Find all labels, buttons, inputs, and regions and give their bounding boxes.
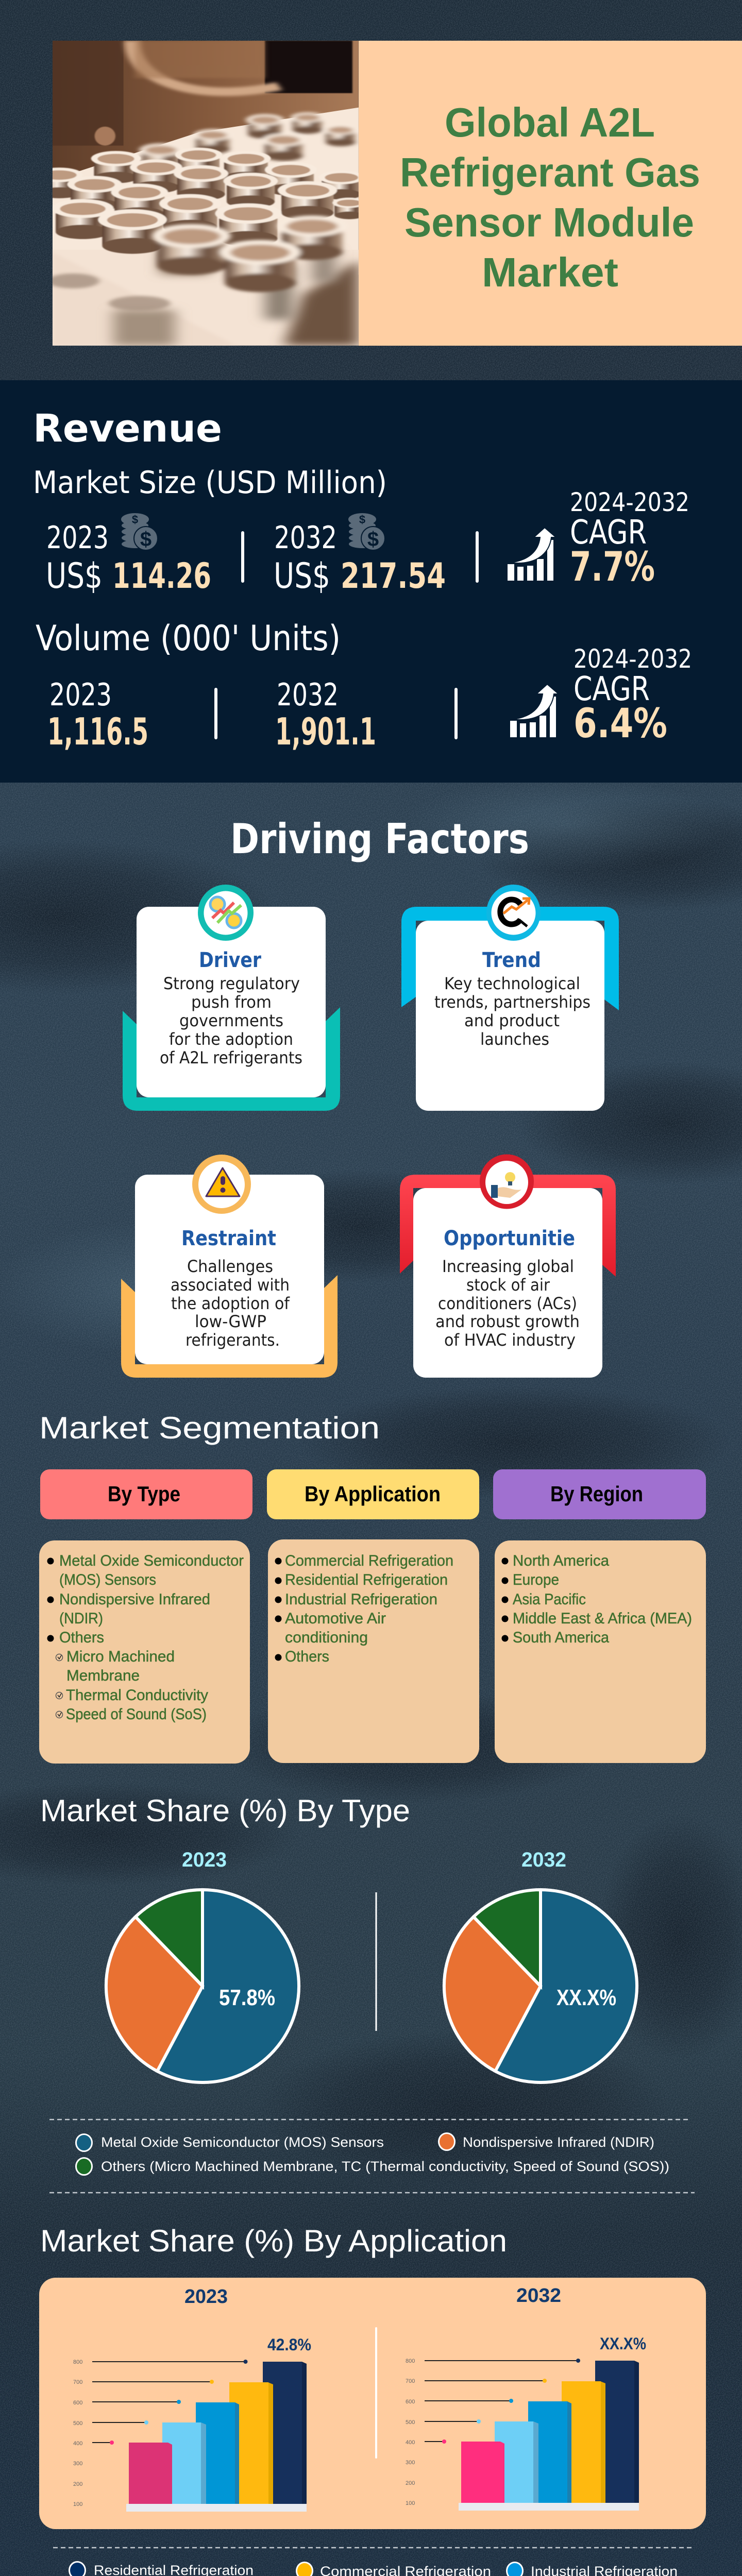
icon: trend: [486, 885, 541, 941]
icon: growth arrow: [508, 528, 556, 581]
text: trend: [434, 948, 591, 1049]
icon: growth arrow: [510, 684, 559, 737]
heading: market share by application: Market Share (%) By Application: [40, 2224, 507, 2258]
text: opportunity: stock of air: [466, 1275, 550, 1295]
text: driver: Driver: [199, 948, 261, 972]
panel: restraint: [121, 1155, 338, 1378]
legend: market share by type: [76, 2133, 669, 2175]
text: opportunity: Increasing global: [442, 1257, 574, 1276]
heading: market segmentation: Market Segmentation: [39, 1411, 380, 1445]
chart: bars 2023: [73, 2286, 311, 2512]
chart: bars 2023: 200: [73, 2481, 82, 2487]
chart: pie 2032: [444, 1849, 637, 2082]
stat: 2032 volume: 2032: [277, 677, 339, 713]
chart: bars 2023: 42.8%: [267, 2335, 311, 2354]
panel: by type header: By Type: [108, 1482, 180, 1506]
panel: by region header: By Region: [550, 1482, 643, 1506]
divider: [375, 2327, 377, 2459]
text: restraint: Restraint: [181, 1227, 276, 1250]
title: Global A2L: [445, 99, 655, 145]
title: [400, 99, 700, 295]
text: driver: for the adoption: [169, 1029, 293, 1049]
stat: 2023 volume: 2023: [49, 677, 112, 713]
title: Sensor Module: [404, 199, 694, 245]
text: trend: and product: [464, 1011, 560, 1030]
chart: bars 2023: 600: [73, 2400, 82, 2406]
text: opportunity: [435, 1227, 580, 1350]
stat: 2032 market size: US$: [274, 556, 330, 597]
legend: market share by application: [69, 2562, 678, 2576]
stat: 2032 volume: 1,901.1: [275, 710, 376, 753]
panel: by type list: (NDIR): [59, 1610, 103, 1627]
panel: by application list: Residential Refrigeration: [285, 1571, 448, 1588]
stat: 2023 market size: 114.26: [112, 556, 211, 597]
chart: pie 2023: 57.8%: [219, 1985, 275, 2010]
panel: opportunity: [400, 1154, 616, 1378]
icon: coins 2023: $: [140, 528, 151, 551]
chart: pie 2032: XX.X%: [556, 1985, 616, 2010]
chart: bars 2032: 2032: [516, 2285, 561, 2307]
chart: bars 2032: 200: [406, 2480, 415, 2486]
icon: driver: [198, 885, 254, 941]
chart: bars 2032: 100: [406, 2500, 415, 2506]
stat: volume CAGR: [574, 644, 692, 747]
panel: by region header: [493, 1469, 706, 1519]
stat: volume CAGR: CAGR: [574, 670, 650, 708]
text: restraint: the adoption of: [171, 1294, 290, 1313]
stat: revenue CAGR: [570, 487, 689, 590]
panel: by type list: [39, 1540, 250, 1764]
panel: by region list: Middle East & Africa (MEA): [513, 1610, 692, 1627]
text: driver: push from: [191, 992, 272, 1012]
chart: bars 2023: 400: [73, 2441, 82, 2447]
text: opportunity: of HVAC industry: [444, 1330, 576, 1350]
text: restraint: low-GWP: [195, 1312, 266, 1331]
heading: market share by type: Market Share (%) By Type: [40, 1793, 410, 1828]
divider: [214, 688, 217, 739]
divider: [375, 1892, 377, 2031]
chart: bars 2023: 300: [73, 2461, 82, 2467]
icon: coins 2032: [348, 513, 385, 551]
heading: driving factors: Driving Factors: [230, 815, 529, 863]
panel: driver: [123, 885, 340, 1111]
stat: volume CAGR: 2024-2032: [574, 644, 692, 674]
panel: by region list: [495, 1540, 706, 1763]
panel: by application header: [267, 1469, 479, 1519]
text: restraint: [171, 1227, 290, 1350]
panel: by type list: Thermal Conductivity: [66, 1687, 208, 1704]
panel: by type list: Metal Oxide Semiconductor: [59, 1552, 244, 1569]
chart: pie 2023: [106, 1849, 299, 2082]
text: trend: trends, partnerships: [434, 992, 591, 1012]
chart: pie 2032: 2032: [521, 1849, 566, 1871]
stat: volume CAGR: 6.4%: [574, 701, 667, 747]
stat: revenue CAGR: CAGR: [570, 514, 647, 552]
panel: by application header: By Application: [305, 1482, 441, 1506]
panel: by type list: (MOS) Sensors: [59, 1571, 156, 1588]
panel: by type header: [40, 1469, 252, 1519]
text: opportunity: and robust growth: [435, 1312, 580, 1331]
panel: by region list: North America: [513, 1552, 609, 1569]
panel: by type list: Nondispersive Infrared: [59, 1591, 210, 1608]
text: restraint: refrigerants.: [185, 1330, 280, 1350]
panel: by application list: Commercial Refrigeration: [285, 1552, 453, 1569]
chart: bars 2023: 500: [73, 2420, 82, 2427]
chart: pie 2023: 2023: [182, 1849, 227, 1871]
icon: coins 2032: $: [367, 528, 379, 551]
stat: 2023 volume: 1,116.5: [47, 710, 148, 753]
stat: 2032 market size: [274, 520, 446, 597]
panel: by application list: [268, 1539, 479, 1763]
stat: revenue CAGR: 2024-2032: [570, 487, 689, 517]
text: driver: of A2L refrigerants: [160, 1048, 302, 1067]
chart: bars 2032: 500: [406, 2419, 415, 2426]
stat: revenue CAGR: 7.7%: [570, 544, 655, 590]
chart: bars 2023: 700: [73, 2379, 82, 2385]
chart: bars 2023: 100: [73, 2501, 82, 2507]
stat: 2032 volume: [275, 677, 376, 753]
chart: bars 2032: 700: [406, 2378, 415, 2384]
icon: coins 2023: $: [132, 513, 138, 526]
divider: [241, 531, 244, 583]
panel: application charts: [39, 2278, 706, 2529]
heading: market size: Market Size (USD Million): [33, 465, 387, 501]
text: opportunity: Opportunitie: [444, 1227, 575, 1250]
icon: coins 2032: $: [359, 513, 365, 526]
text: trend: Key technological: [444, 974, 580, 993]
icon: opportunity: [480, 1154, 534, 1209]
chart: bars 2032: 400: [406, 2439, 415, 2446]
panel: revenue: [0, 380, 742, 783]
panel: by application list: Others: [285, 1648, 329, 1665]
text: restraint: associated with: [171, 1275, 290, 1295]
panel: by type list: Speed of Sound (SoS): [66, 1706, 207, 1723]
chart: bars 2032: [406, 2285, 646, 2511]
text: opportunity: conditioners (ACs): [438, 1294, 577, 1313]
stat: 2023 market size: 2023: [46, 520, 109, 556]
panel: by application list: Automotive Air: [285, 1610, 386, 1627]
chart: bars 2032: 600: [406, 2399, 415, 2405]
icon: coins 2023: [121, 513, 158, 551]
legend: market share by type: Metal Oxide Semiconductor (MOS) Sensors: [101, 2134, 384, 2150]
panel: by type list: Membrane: [66, 1667, 140, 1684]
panel: by region list: Asia Pacific: [513, 1591, 586, 1608]
text: trend: Trend: [482, 948, 541, 972]
divider: [476, 531, 479, 583]
icon: restraint: [192, 1155, 251, 1214]
panel: by application list: Industrial Refrigeration: [285, 1591, 437, 1608]
hero photo: gas sensors: [36, 41, 366, 346]
text: trend: launches: [480, 1029, 549, 1049]
panel: by type list: Others: [59, 1629, 104, 1646]
stat: 2023 market size: [46, 520, 211, 597]
heading: revenue: Revenue: [33, 406, 222, 451]
chart: bars 2032: XX.X%: [600, 2334, 646, 2353]
stat: 2032 market size: 217.54: [341, 556, 446, 597]
title: Market: [482, 249, 618, 295]
chart: bars 2032: 300: [406, 2460, 415, 2466]
chart: bars 2023: 800: [73, 2359, 82, 2365]
panel: by region list: Europe: [513, 1571, 559, 1588]
legend: market share by type: Others (Micro Machined Membrane, TC (Thermal conductivity, Speed of Sound (SOS)): [101, 2159, 669, 2174]
legend: market share by type: Nondispersive Infrared (NDIR): [463, 2134, 654, 2150]
panel: title box: [359, 41, 742, 346]
text: driver: [160, 948, 302, 1067]
stat: 2023 market size: US$: [46, 556, 103, 597]
text: restraint: Challenges: [187, 1257, 273, 1276]
panel: by type list: Micro Machined: [66, 1648, 175, 1665]
panel: by region list: South America: [513, 1629, 609, 1646]
stat: 2032 market size: 2032: [274, 520, 337, 556]
heading: volume: Volume (000' Units): [36, 618, 341, 659]
title: Refrigerant Gas: [400, 149, 700, 195]
text: driver: Strong regulatory: [163, 974, 300, 993]
panel: trend: [401, 885, 619, 1111]
stat: 2023 volume: [47, 677, 148, 753]
panel: by application list: conditioning: [285, 1629, 368, 1646]
divider: [454, 688, 458, 739]
chart: bars 2023: 2023: [184, 2286, 228, 2308]
chart: bars 2032: 800: [406, 2358, 415, 2364]
text: driver: governments: [179, 1011, 283, 1030]
